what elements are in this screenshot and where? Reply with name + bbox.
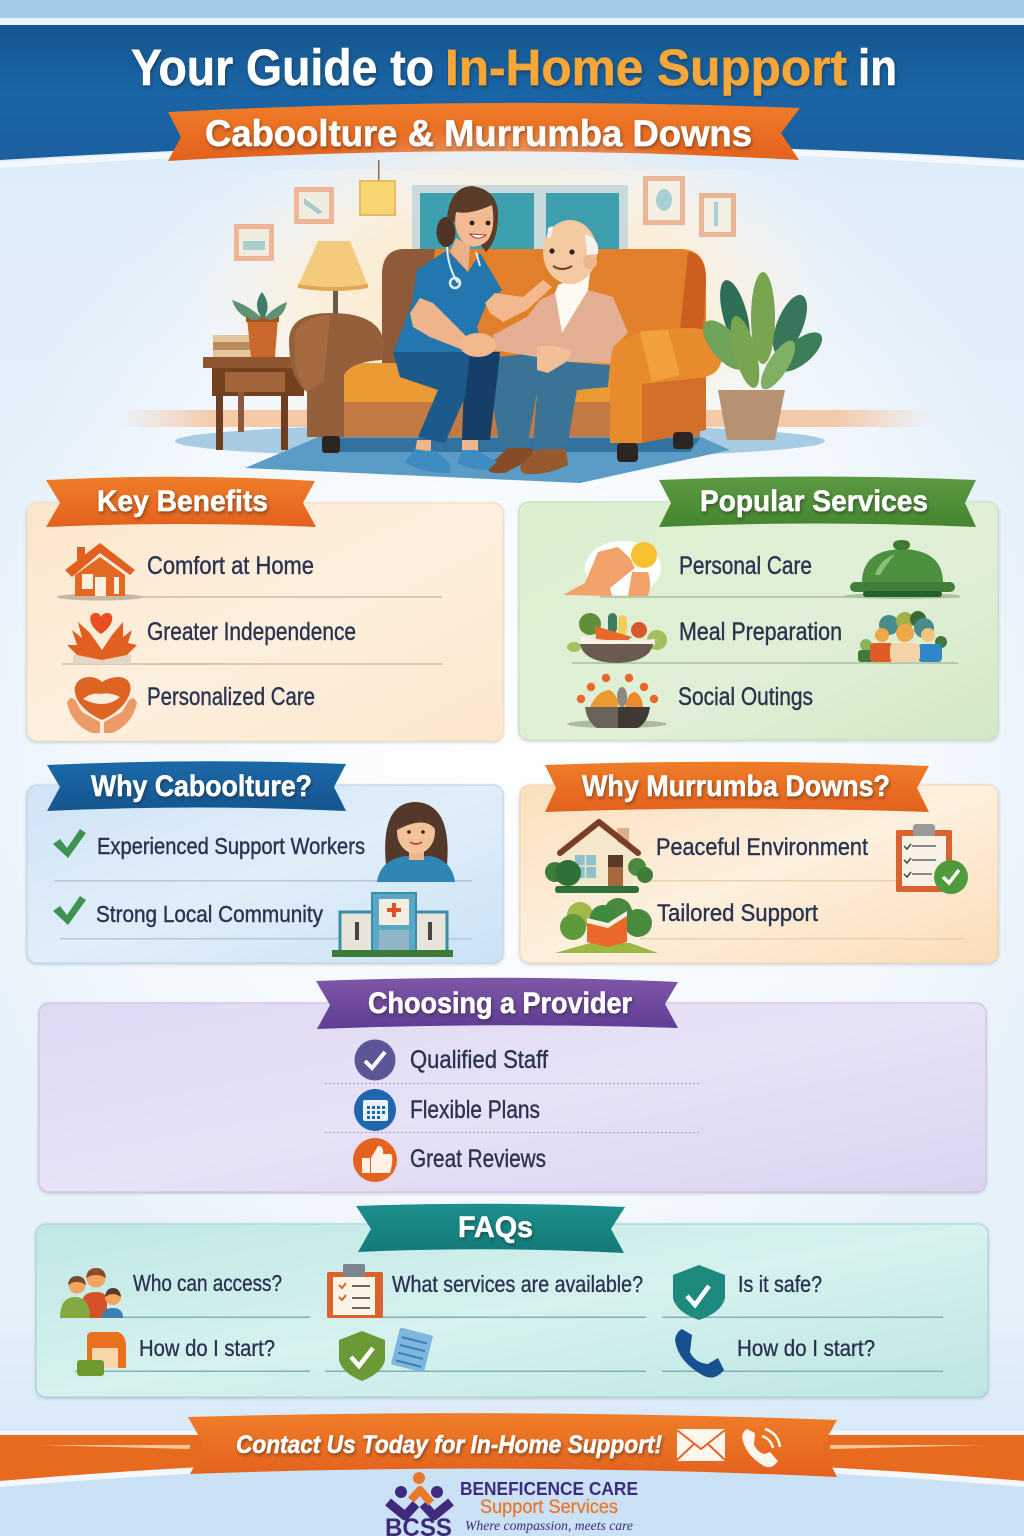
- item: qualified staff: [325, 1040, 701, 1084]
- heading: why caboolture: [47, 761, 346, 811]
- panel: key benefits: [27, 477, 503, 741]
- panel: popular services: [519, 476, 998, 740]
- item: experienced support workers: Experienced Support Workers: [97, 833, 365, 859]
- panel: why murrumba downs: [520, 762, 998, 963]
- item: personalized care: Personalized Care: [147, 683, 315, 711]
- faq: how do I start (right): How do I start?: [737, 1335, 875, 1361]
- heading: faqs: FAQs: [458, 1211, 533, 1244]
- heading: popular services: Popular Services: [700, 485, 928, 518]
- item: greater independence: Greater Independence: [147, 618, 356, 646]
- panel: choosing a provider: [39, 978, 986, 1192]
- call to action ribbon: Contact Us Today for In-Home Support!: [236, 1431, 662, 1459]
- rug: [175, 424, 825, 483]
- item: meal preparation: [567, 613, 958, 664]
- item: great reviews: [353, 1138, 546, 1182]
- item: meal preparation: Meal Preparation: [679, 618, 842, 646]
- panel: why caboolture: [27, 761, 503, 963]
- title: [131, 39, 897, 96]
- icon: green cloche: [844, 540, 960, 599]
- item: tailored support: [555, 898, 964, 953]
- logo: BCSS: Support Services: [480, 1497, 618, 1518]
- item: peaceful environment: [545, 822, 964, 893]
- heading: choosing a provider: [316, 978, 678, 1029]
- item: personal care: [563, 541, 960, 598]
- hero illustration: carer and elderly man on sofa: [120, 125, 930, 483]
- icon: support worker portrait: [377, 802, 455, 882]
- icon: envelope: [677, 1429, 725, 1461]
- item: qualified staff: Qualified Staff: [410, 1046, 548, 1074]
- item: greater independence: [62, 613, 442, 665]
- pendant lamp: [360, 160, 395, 215]
- faq: what services are available: [327, 1264, 646, 1318]
- floor plant: [695, 272, 828, 440]
- heading: popular services: [659, 476, 976, 527]
- item: flexible plans: Flexible Plans: [410, 1096, 540, 1124]
- item: personalized care: [67, 677, 315, 733]
- call to action ribbon: [188, 1413, 837, 1477]
- item: peaceful environment: Peaceful Environment: [656, 834, 868, 861]
- carer's shoes: [405, 449, 497, 473]
- item: social outings: [567, 674, 813, 728]
- item: strong local community: [53, 896, 472, 940]
- heading: key benefits: [46, 477, 316, 527]
- title: In-Home Support: [445, 39, 847, 96]
- faq: is it safe: Is it safe?: [738, 1271, 822, 1297]
- item: comfort at home: Comfort at Home: [147, 552, 314, 580]
- man's shoes: [488, 448, 568, 474]
- item: flexible plans: [325, 1089, 701, 1132]
- item: social outings: Social Outings: [678, 683, 813, 711]
- logo: BCSS: Where compassion, meets care: [465, 1519, 633, 1534]
- faq: who can access: Who can access?: [133, 1270, 282, 1296]
- faq: how do I start (right): [662, 1329, 943, 1378]
- logo mark: [388, 1472, 451, 1516]
- faq: how do I start (left): [75, 1332, 310, 1376]
- title: in: [858, 39, 897, 96]
- item: strong local community: Strong Local Community: [96, 901, 323, 927]
- heading: key benefits: Key Benefits: [97, 485, 268, 518]
- carer: [393, 186, 552, 473]
- faq: what services are available: What services are available?: [392, 1271, 643, 1297]
- window: [412, 185, 628, 251]
- title: Your Guide to: [131, 39, 434, 96]
- heading: faqs: [356, 1204, 625, 1253]
- logo: BCSS: BENEFICENCE CARE: [460, 1479, 638, 1499]
- table lamp: [298, 241, 368, 318]
- header band: [0, 0, 1024, 165]
- item: personal care: Personal Care: [679, 552, 812, 580]
- heading: why murrumba downs: Why Murrumba Downs?: [582, 770, 890, 803]
- wall pictures: [234, 176, 736, 261]
- item: great reviews: Great Reviews: [410, 1145, 546, 1173]
- icon: clipboard with check: [896, 824, 968, 894]
- heading: choosing a provider: Choosing a Provider: [368, 987, 632, 1020]
- item: tailored support: Tailored Support: [657, 900, 818, 927]
- faq: is it safe: [662, 1265, 943, 1320]
- icon: group of people: [858, 611, 947, 662]
- elderly man: [488, 220, 628, 474]
- faq: who can access: [60, 1268, 310, 1318]
- faq: how do I start (left): How do I start?: [139, 1335, 275, 1361]
- item: experienced support workers: [53, 829, 472, 882]
- sofa: [289, 249, 722, 462]
- subtitle ribbon: [168, 103, 800, 161]
- item: comfort at home: [57, 543, 442, 600]
- panel: faqs: [36, 1204, 988, 1397]
- heading: why caboolture: Why Caboolture?: [91, 770, 312, 803]
- logo: BCSS: [385, 1472, 638, 1536]
- heading: why murrumba downs: [545, 762, 929, 812]
- side table with books and plant: [203, 292, 308, 450]
- subtitle ribbon: Caboolture & Murrumba Downs: [205, 113, 752, 154]
- footer area: [0, 1431, 1024, 1536]
- icons: green shield and notepad: [325, 1327, 646, 1381]
- icon: hospital building: [332, 893, 453, 957]
- icon: phone: [742, 1429, 780, 1467]
